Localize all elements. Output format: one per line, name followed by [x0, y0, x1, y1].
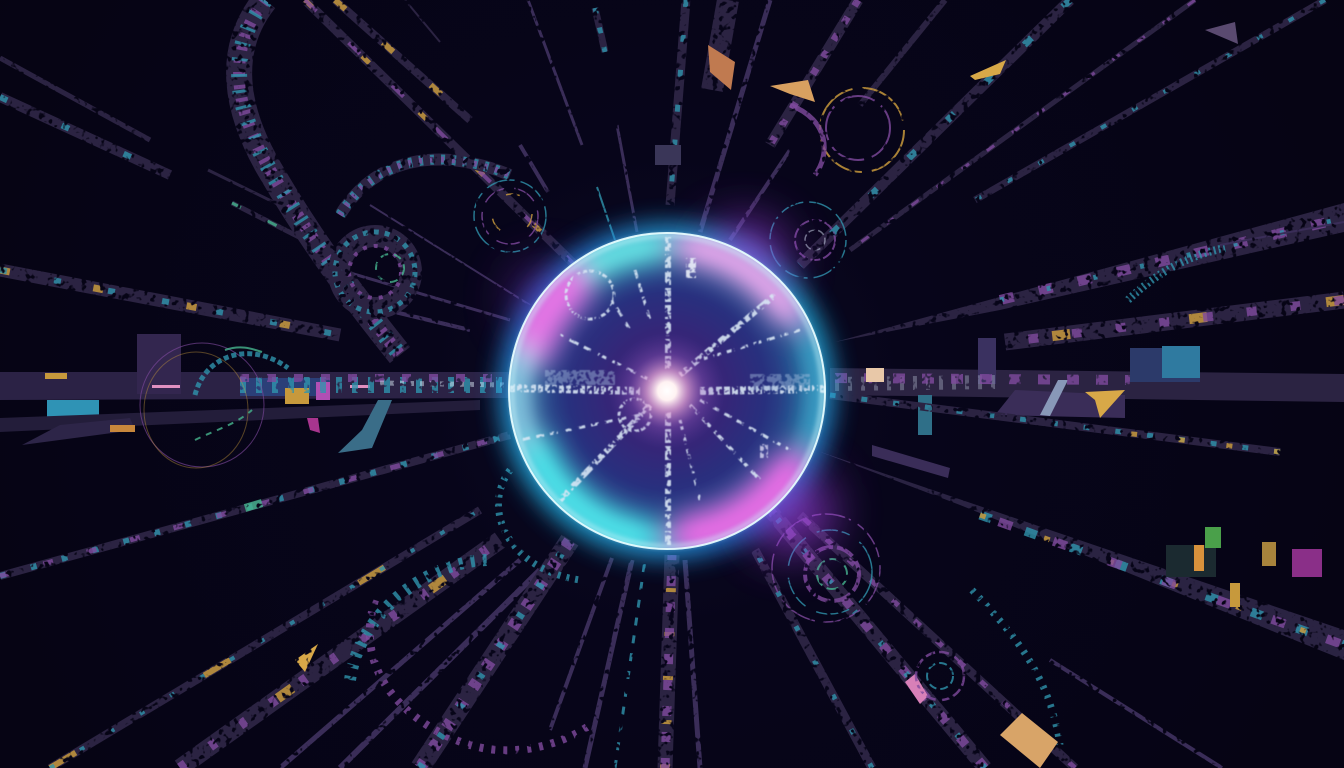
spiral rings: upper right	[770, 88, 904, 278]
central light flare	[609, 333, 725, 449]
rays: right	[830, 203, 1344, 452]
rays: upper right	[655, 0, 1344, 265]
rays: upper left	[0, 0, 637, 330]
sphere rim	[509, 233, 825, 549]
rays: lower right	[755, 445, 1344, 768]
ring: left	[140, 343, 288, 468]
rays: left	[0, 270, 510, 576]
sphere outer glow	[499, 220, 835, 559]
rays: lower left	[50, 470, 700, 768]
glowing sphere	[508, 232, 826, 550]
sphere colour crescents	[517, 246, 816, 537]
spiral rings: lower right	[772, 514, 964, 700]
curved data band: upper left	[239, 0, 510, 355]
spiral rings: upper left	[335, 180, 546, 312]
sphere data fragments	[510, 235, 825, 545]
